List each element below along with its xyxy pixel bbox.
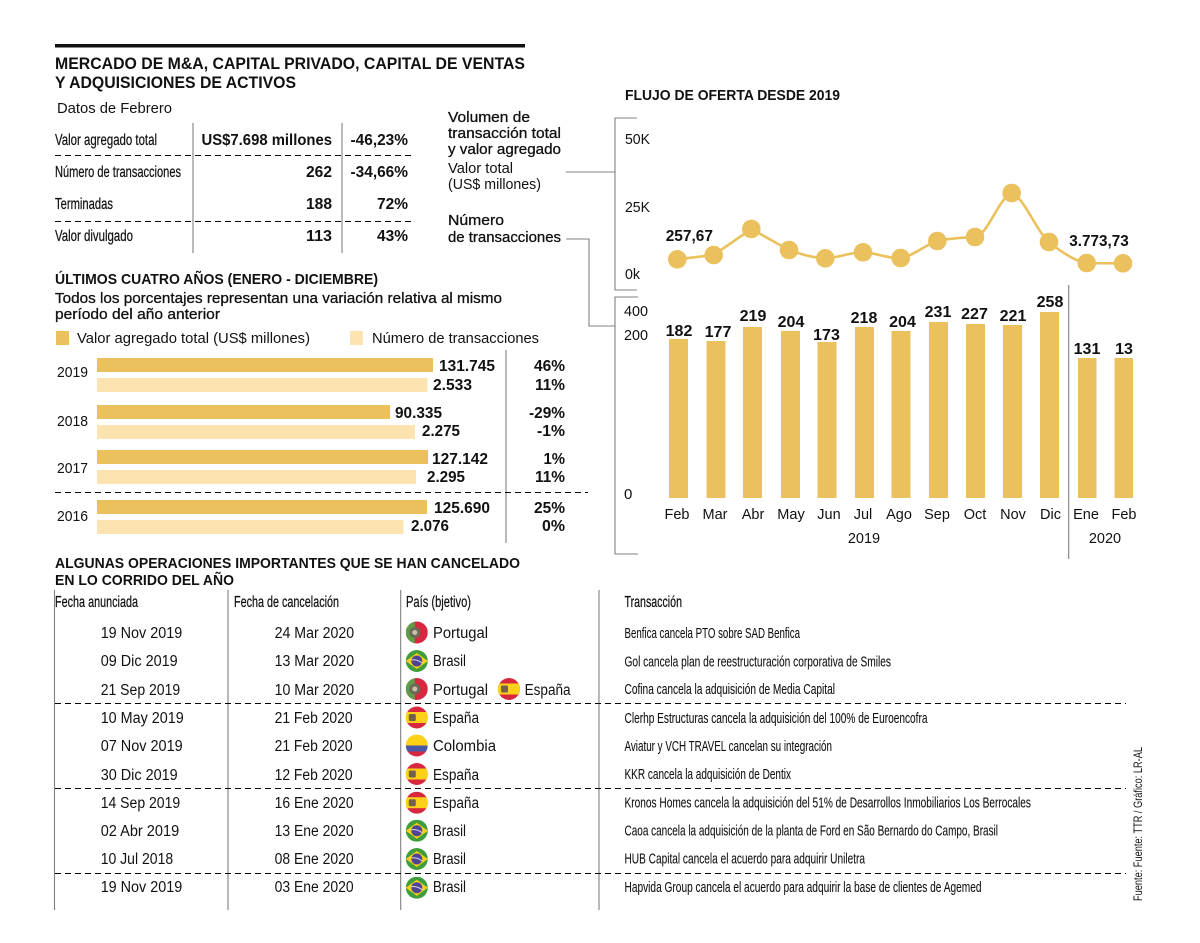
bar chart: monthly transactions: 221 bbox=[1000, 308, 1026, 325]
bar chart: monthly transactions: Ago bbox=[886, 507, 912, 523]
table header: Fecha anunciada bbox=[55, 594, 138, 611]
bar chart: monthly transactions: 0 bbox=[624, 486, 632, 503]
icon: flag of Brazil bbox=[406, 848, 428, 870]
bar chart: yearly value and transactions bbox=[55, 350, 588, 543]
countries with flag icons: España bbox=[433, 710, 479, 727]
heading: EN LO CORRIDO DEL AÑO bbox=[55, 571, 234, 589]
table: February data: 43% bbox=[377, 228, 408, 245]
title: Y ADQUISICIONES DE ACTIVOS bbox=[55, 73, 296, 92]
panel: last four years bbox=[55, 270, 588, 543]
countries with flag icons: Portugal bbox=[433, 682, 488, 699]
heading: ALGUNAS OPERACIONES IMPORTANTES QUE SE HAN CANCELADO bbox=[55, 555, 520, 572]
cancellation dates: 08 Ene 2020 bbox=[275, 851, 354, 868]
bar chart: monthly transactions: 13 bbox=[1115, 341, 1133, 358]
table: February data: US$7.698 millones bbox=[202, 132, 332, 149]
legend: Número de transacciones bbox=[372, 330, 539, 347]
note on percentages bbox=[55, 290, 502, 323]
label: transaction volume bbox=[448, 109, 561, 193]
table: February data: 72% bbox=[377, 196, 408, 213]
cancellation dates: 12 Feb 2020 bbox=[275, 767, 353, 784]
bar chart: monthly transactions: 204 bbox=[889, 314, 916, 331]
title bbox=[55, 54, 525, 92]
bar chart: monthly transactions: Sep bbox=[924, 507, 950, 523]
icon: flag of Spain bbox=[498, 678, 520, 700]
line chart: total value: 257,67 bbox=[666, 228, 713, 245]
transactions: Benfica cancela PTO sobre SAD Benfica bbox=[624, 626, 801, 642]
year 2017: 127.142 bbox=[432, 451, 488, 468]
bar chart: monthly transactions: Mar bbox=[703, 507, 728, 523]
bar chart: monthly transactions: Dic bbox=[1040, 507, 1061, 523]
announced dates: 19 Nov 2019 bbox=[101, 625, 182, 642]
bar chart: monthly transactions: 173 bbox=[813, 327, 840, 344]
transactions: HUB Capital cancela el acuerdo para adquirir Uniletra bbox=[624, 852, 866, 868]
bar chart: monthly transactions: 200 bbox=[624, 327, 648, 344]
title: MERCADO DE M&A, CAPITAL PRIVADO, CAPITAL DE VENTAS bbox=[55, 54, 525, 73]
icon: flag of Brazil bbox=[406, 650, 428, 672]
table: February data: 262 bbox=[306, 164, 332, 181]
year 2017: 2.295 bbox=[427, 469, 465, 486]
transactions bbox=[624, 626, 1031, 896]
bar chart: monthly transactions: May bbox=[777, 507, 805, 523]
year 2018: 90.335 bbox=[395, 405, 442, 422]
table: February data: Terminadas bbox=[55, 196, 113, 213]
cancellation dates: 03 Ene 2020 bbox=[275, 879, 354, 896]
heading bbox=[55, 555, 520, 589]
year 2019: 46% bbox=[534, 358, 565, 375]
line chart: total value bbox=[625, 131, 1132, 283]
year 2016 bbox=[57, 500, 565, 535]
bar chart: monthly transactions: Feb bbox=[664, 507, 690, 523]
announced dates: 07 Nov 2019 bbox=[101, 738, 183, 755]
table grid bbox=[54, 590, 1126, 910]
announced dates: 09 Dic 2019 bbox=[101, 653, 178, 670]
icon: flag of Portugal bbox=[406, 678, 428, 700]
table: February data: 188 bbox=[306, 196, 332, 213]
announced dates: 02 Abr 2019 bbox=[101, 823, 179, 840]
subtitle: Datos de Febrero: Datos de Febrero bbox=[57, 100, 172, 117]
year 2019: 131.745 bbox=[439, 358, 495, 375]
label: transaction volume: Volumen de bbox=[448, 109, 530, 126]
bar chart: monthly transactions: 227 bbox=[961, 306, 988, 323]
cancellation dates: 16 Ene 2020 bbox=[275, 795, 354, 812]
table: February data: Valor divulgado bbox=[55, 228, 133, 245]
line chart: total value: 25K bbox=[625, 199, 650, 216]
bar chart: monthly transactions: 177 bbox=[705, 324, 731, 341]
countries with flag icons: Portugal bbox=[433, 625, 488, 642]
line chart: total value: 3.773,73 bbox=[1069, 233, 1129, 250]
bar chart: monthly transactions bbox=[624, 285, 1136, 559]
year 2017: 1% bbox=[544, 451, 565, 468]
table header: Transacción bbox=[624, 594, 682, 611]
year 2016: 2016 bbox=[57, 508, 88, 525]
countries with flag icons: España bbox=[433, 795, 479, 812]
transactions: Kronos Homes cancela la adquisición del 51% de Desarrollos Inmobiliarios Los Berrocales bbox=[624, 796, 1031, 812]
transactions: Gol cancela plan de reestructuración corporativa de Smiles bbox=[624, 654, 891, 670]
year 2018: -29% bbox=[529, 405, 565, 422]
table: February data: -46,23% bbox=[350, 132, 408, 149]
icon: flag of Spain bbox=[406, 792, 428, 814]
year 2017 bbox=[57, 450, 565, 486]
table header: Fecha de cancelación bbox=[234, 594, 339, 611]
note on percentages: período del año anterior bbox=[55, 306, 220, 323]
panel: cancelled operations bbox=[54, 555, 1126, 910]
line chart: total value: 50K bbox=[625, 131, 650, 148]
legend bbox=[56, 330, 539, 347]
label: transaction volume: (US$ millones) bbox=[448, 176, 541, 193]
top rule bbox=[55, 44, 525, 48]
countries with flag icons: España bbox=[433, 767, 479, 784]
bar chart: monthly transactions: 204 bbox=[778, 314, 804, 331]
cancellation dates: 24 Mar 2020 bbox=[275, 625, 354, 642]
icon: flag of Spain bbox=[406, 706, 428, 728]
table: February data: -34,66% bbox=[350, 164, 408, 181]
year 2016: 25% bbox=[534, 500, 565, 517]
announced dates: 19 Nov 2019 bbox=[101, 879, 182, 896]
transactions: Aviatur y VCH TRAVEL cancelan su integración bbox=[624, 739, 832, 755]
cancellation dates: 13 Mar 2020 bbox=[275, 653, 354, 670]
icon: flag of Portugal bbox=[406, 622, 428, 644]
countries with flag icons: Brasil bbox=[433, 823, 466, 840]
announced dates: 21 Sep 2019 bbox=[101, 682, 180, 699]
transactions: Cofina cancela la adquisición de Media Capital bbox=[624, 682, 835, 698]
bar chart: monthly transactions: 231 bbox=[925, 304, 951, 321]
label: number of transactions: Número bbox=[448, 212, 504, 229]
bar chart: monthly transactions: 400 bbox=[624, 303, 648, 320]
bar chart: monthly transactions: 219 bbox=[740, 308, 766, 325]
label: transaction volume: Valor total bbox=[448, 160, 513, 177]
panel: deal flow since 2019 bbox=[448, 87, 1136, 559]
bar chart: monthly transactions: 258 bbox=[1037, 294, 1063, 311]
countries with flag icons: Colombia bbox=[433, 738, 496, 755]
cancellation dates: 10 Mar 2020 bbox=[275, 682, 354, 699]
heading: ÚLTIMOS CUATRO AÑOS (ENERO - DICIEMBRE) bbox=[55, 270, 378, 288]
cancellation dates: 21 Feb 2020 bbox=[275, 738, 353, 755]
brackets and leader lines bbox=[566, 118, 638, 554]
bar chart: monthly transactions: 218 bbox=[851, 310, 877, 327]
year 2017: 11% bbox=[535, 469, 565, 486]
icon: flag of Spain bbox=[406, 763, 428, 785]
cancellation dates: 13 Ene 2020 bbox=[275, 823, 354, 840]
table: February data: 113 bbox=[306, 228, 332, 245]
bar chart: monthly transactions: Nov bbox=[1000, 507, 1027, 523]
year 2018: 2.275 bbox=[422, 423, 460, 440]
year 2019: 11% bbox=[535, 377, 565, 394]
cancellation dates: 21 Feb 2020 bbox=[275, 710, 353, 727]
announced dates: 30 Dic 2019 bbox=[101, 767, 178, 784]
source credit: Fuente: Fuente: TTR / Gráfico: LR-AL bbox=[1131, 747, 1145, 901]
year 2017: 2017 bbox=[57, 460, 88, 477]
bar chart: monthly transactions: Jun bbox=[817, 507, 841, 523]
countries with flag icons: España bbox=[525, 682, 571, 699]
year 2018 bbox=[57, 405, 565, 440]
icon: flag of Brazil bbox=[406, 820, 428, 842]
bar chart: monthly transactions: 131 bbox=[1074, 341, 1100, 358]
year 2016: 0% bbox=[542, 518, 565, 535]
countries with flag icons: Brasil bbox=[433, 653, 466, 670]
announced dates: 10 May 2019 bbox=[101, 710, 184, 727]
label: transaction volume: transacción total bbox=[448, 125, 561, 142]
transactions: Caoa cancela la adquisición de la planta de Ford en São Bernardo do Campo, Brasil bbox=[624, 824, 998, 840]
bar chart: monthly transactions: Abr bbox=[742, 507, 764, 523]
countries with flag icons: Brasil bbox=[433, 851, 466, 868]
transactions: KKR cancela la adquisición de Dentix bbox=[624, 767, 792, 783]
table header: País (bjetivo) bbox=[406, 594, 471, 611]
bar chart: monthly transactions: 2020 bbox=[1089, 531, 1121, 547]
transactions: Clerhp Estructuras cancela la adquisición del 100% de Euroencofra bbox=[624, 711, 928, 727]
note on percentages: Todos los porcentajes representan una variación relativa al mismo bbox=[55, 290, 502, 307]
icon: flag of Colombia bbox=[406, 734, 428, 756]
year 2019: 2.533 bbox=[433, 377, 472, 394]
legend: Valor agregado total (US$ millones) bbox=[77, 330, 310, 347]
icon: flag of Brazil bbox=[406, 877, 428, 899]
bar chart: monthly transactions: Feb bbox=[1112, 507, 1136, 523]
bar chart: monthly transactions: Jul bbox=[854, 507, 872, 523]
bar chart: monthly transactions: Oct bbox=[964, 507, 986, 523]
label: number of transactions: de transacciones bbox=[448, 229, 561, 246]
label: number of transactions bbox=[448, 212, 561, 246]
label: transaction volume: y valor agregado bbox=[448, 141, 561, 158]
announced dates: 14 Sep 2019 bbox=[101, 795, 180, 812]
year 2016: 2.076 bbox=[411, 518, 449, 535]
panel: M&A summary bbox=[55, 44, 525, 253]
year 2018: -1% bbox=[537, 423, 565, 440]
table header bbox=[55, 594, 682, 611]
transactions: Hapvida Group cancela el acuerdo para adquirir la base de clientes de Agemed bbox=[624, 880, 982, 896]
year 2018: 2018 bbox=[57, 413, 88, 430]
announced dates bbox=[101, 625, 184, 896]
year 2019 bbox=[57, 358, 565, 394]
table: February data: Valor agregado total bbox=[55, 132, 157, 149]
cancellation dates bbox=[275, 625, 354, 896]
heading: FLUJO DE OFERTA DESDE 2019 bbox=[625, 87, 840, 104]
countries with flag icons bbox=[406, 622, 571, 899]
bar chart: monthly transactions: Ene bbox=[1073, 507, 1099, 523]
bar chart: monthly transactions: 2019 bbox=[848, 531, 880, 547]
announced dates: 10 Jul 2018 bbox=[101, 851, 173, 868]
year 2019: 2019 bbox=[57, 364, 88, 381]
line chart: total value: 0k bbox=[625, 266, 640, 283]
bar chart: monthly transactions: 182 bbox=[666, 323, 692, 340]
table: February data bbox=[55, 123, 415, 253]
table: February data: Número de transacciones bbox=[55, 164, 181, 181]
countries with flag icons: Brasil bbox=[433, 879, 466, 896]
year 2016: 125.690 bbox=[434, 500, 490, 517]
